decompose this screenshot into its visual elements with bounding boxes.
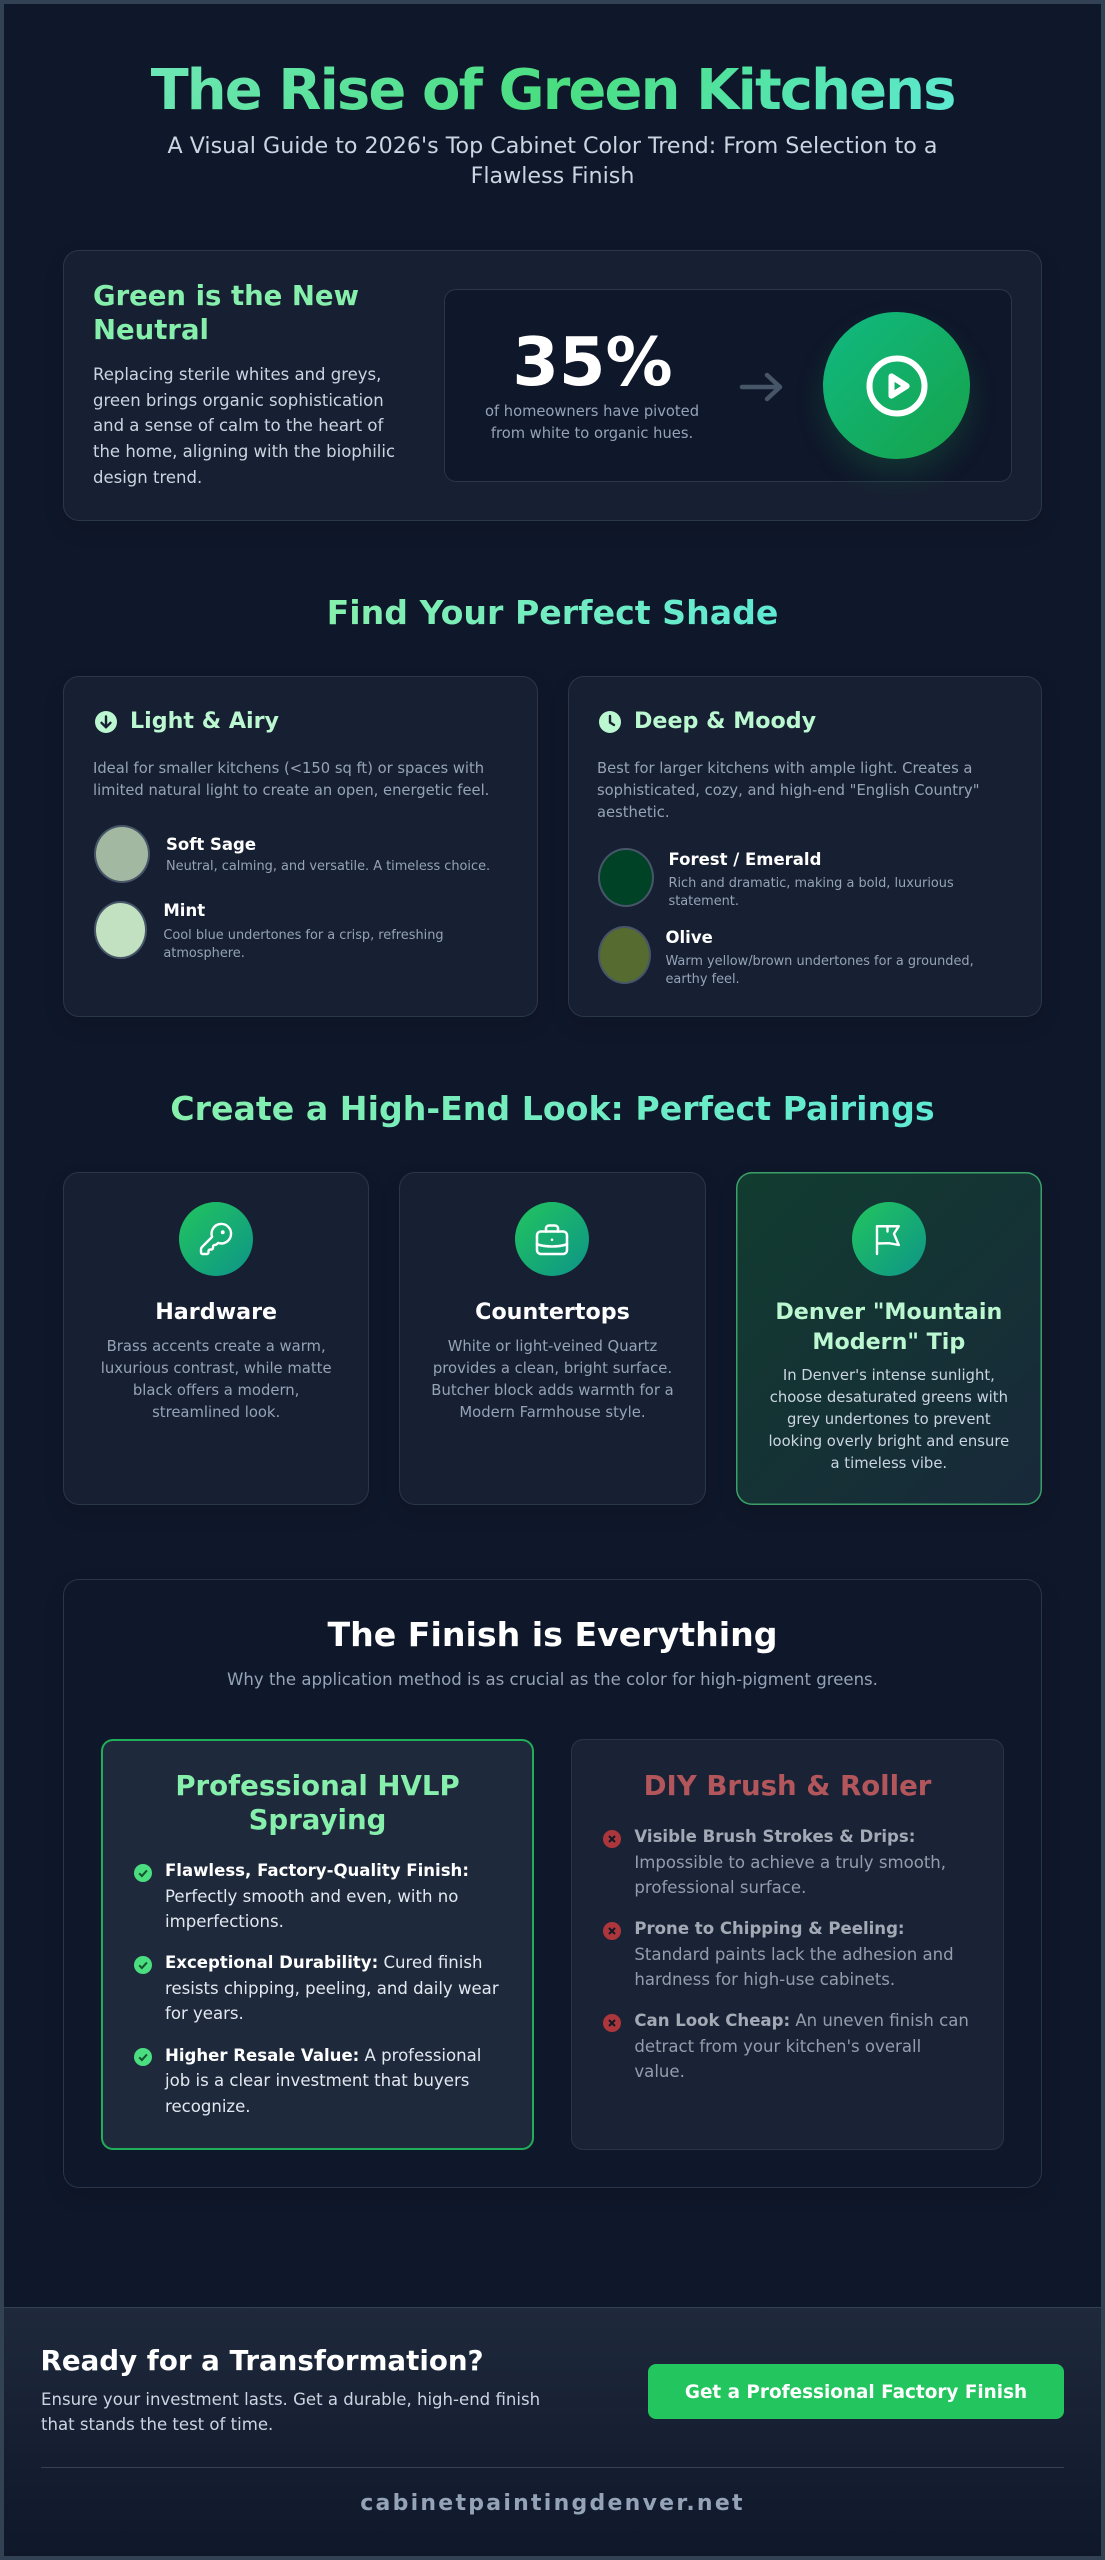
text: In Denver's intense sunlight, — [783, 1367, 995, 1384]
list item: Standard paints lack the adhesion and — [634, 1945, 954, 1964]
list item: Perfectly smooth and even, with no — [165, 1887, 458, 1906]
text: Brass accents create a warm, — [107, 1338, 326, 1355]
text — [101, 1338, 332, 1421]
description — [93, 760, 489, 799]
text block: Replacing sterile whites and greys, — [93, 365, 381, 384]
heading: The Finish is Everything — [327, 1615, 778, 1654]
mint name: Mint — [163, 901, 205, 920]
text block: and a sense of calm to the heart of — [93, 416, 383, 435]
heading: Professional HVLP — [175, 1769, 460, 1802]
icon: cross — [603, 1830, 621, 1848]
list item: value. — [634, 2062, 685, 2081]
description: aesthetic. — [597, 804, 670, 821]
panel: hardware — [63, 1172, 369, 1505]
section heading: perfect pairings: Create a High-End Look: Perfect Pairings — [170, 1089, 935, 1128]
stat caption: from white to organic hues. — [491, 425, 693, 442]
olive note — [666, 954, 974, 987]
stat caption — [485, 403, 699, 442]
text: provides a clean, bright surface. — [433, 1360, 672, 1377]
olive note: earthy feel. — [666, 972, 740, 987]
button: Get a Professional Factory Finish — [685, 2382, 1027, 2402]
mint note: Cool blue undertones for a crisp, refreshing — [163, 928, 444, 943]
panel: green is the new neutral — [63, 250, 1042, 521]
text: choose desaturated greens with — [770, 1389, 1008, 1406]
swatch: forest — [598, 848, 654, 907]
swatch: soft sage — [94, 825, 150, 883]
footer text: Ensure your investment lasts. Get a durable, high-end finish — [41, 2390, 540, 2408]
heading — [175, 1769, 460, 1836]
list item: Higher Resale Value: A professional — [165, 2046, 481, 2064]
panel: professional spraying — [101, 1739, 534, 2150]
forest note: Rich and dramatic, making a bold, luxurious — [668, 876, 954, 891]
list item — [634, 1919, 954, 1989]
icon: clock — [599, 711, 621, 733]
text — [768, 1367, 1009, 1472]
heading: Spraying — [249, 1803, 386, 1836]
heading: Denver "Mountain — [775, 1299, 1002, 1325]
panel: light and airy — [63, 676, 538, 1017]
soft sage note: Neutral, calming, and versatile. A timeless choice. — [166, 859, 490, 874]
subtitle — [167, 133, 938, 189]
text: black offers a modern, — [133, 1382, 299, 1399]
forest note: statement. — [668, 894, 739, 909]
forest note — [668, 876, 954, 909]
text — [431, 1338, 674, 1421]
icon: cross — [603, 1922, 621, 1940]
text: streamlined look. — [152, 1404, 280, 1421]
icon: check — [134, 1956, 152, 1974]
footer heading: Ready for a Transformation? — [40, 2344, 484, 2377]
panel: diy brush and roller — [571, 1739, 1004, 2150]
list item: Prone to Chipping & Peeling: — [634, 1919, 905, 1938]
text block: green brings organic sophistication — [93, 391, 384, 410]
subtitle: Flawless Finish — [471, 163, 634, 189]
text block — [93, 365, 395, 487]
list item — [634, 2011, 969, 2081]
description: Best for larger kitchens with ample light. Creates a — [597, 760, 972, 777]
list item — [164, 2046, 481, 2116]
heading: Green is the New — [93, 280, 359, 312]
panel: denver tip — [736, 1172, 1042, 1505]
list item: detract from your kitchen's overall — [634, 2037, 921, 2056]
description: limited natural light to create an open, energetic feel. — [93, 782, 489, 799]
subtitle: Why the application method is as crucial as the color for high-pigment greens. — [227, 1670, 878, 1689]
footer text — [41, 2390, 540, 2434]
stat box — [444, 289, 1012, 482]
mint note: atmosphere. — [163, 946, 245, 961]
description: sophisticated, cozy, and high-end "English Country" — [597, 782, 980, 799]
footer text: that stands the test of time. — [41, 2415, 273, 2434]
section heading: find your perfect shade: Find Your Perfect Shade — [327, 593, 778, 632]
swatch: mint — [94, 901, 147, 959]
text: White or light-veined Quartz — [448, 1338, 657, 1355]
list item: for years. — [165, 2004, 244, 2023]
text: grey undertones to prevent — [787, 1411, 991, 1428]
text: Butcher block adds warmth for a — [431, 1382, 674, 1399]
text: a timeless vibe. — [831, 1455, 947, 1472]
text: looking overly bright and ensure — [768, 1433, 1009, 1450]
heading: Countertops — [475, 1299, 630, 1325]
description — [597, 760, 980, 821]
heading: DIY Brush & Roller — [644, 1769, 931, 1802]
heading: Hardware — [155, 1299, 277, 1325]
panel: deep and moody — [568, 676, 1042, 1017]
list item: Visible Brush Strokes & Drips: — [634, 1827, 915, 1846]
heading — [775, 1299, 1002, 1355]
icon: check — [134, 1864, 152, 1882]
olive name: Olive — [666, 928, 713, 947]
list item — [165, 1953, 499, 2023]
stat caption: of homeowners have pivoted — [485, 403, 699, 420]
text: Modern Farmhouse style. — [459, 1404, 646, 1421]
list item: Impossible to achieve a truly smooth, — [634, 1853, 946, 1872]
icon: flag — [852, 1202, 926, 1276]
list item: Exceptional Durability: Cured finish — [165, 1953, 483, 1972]
panel: countertops — [399, 1172, 706, 1505]
list item: resists chipping, peeling, and daily wear — [165, 1979, 499, 1998]
panel: the finish is everything — [63, 1579, 1042, 2188]
title: The Rise of Green Kitchens — [150, 58, 955, 122]
list item: recognize. — [165, 2097, 251, 2116]
list item: hardness for high-use cabinets. — [634, 1970, 895, 1989]
heading — [93, 280, 359, 346]
button — [648, 2364, 1064, 2419]
swatch: olive — [598, 926, 650, 984]
heading: Light & Airy — [130, 708, 279, 734]
heading: Modern" Tip — [812, 1329, 965, 1355]
list item — [165, 1861, 469, 1931]
text block: the home, aligning with the biophilic — [93, 442, 395, 461]
icon: briefcase — [515, 1202, 589, 1276]
list item: job is a clear investment that buyers — [165, 2071, 469, 2090]
stat number: 35% — [512, 322, 673, 400]
icon: check — [134, 2048, 152, 2066]
icon: arrow down circle — [95, 711, 117, 733]
text: luxurious contrast, while matte — [101, 1360, 332, 1377]
soft sage name: Soft Sage — [166, 834, 256, 854]
forest name: Forest / Emerald — [668, 850, 821, 868]
arrow — [740, 372, 782, 402]
description: Ideal for smaller kitchens (<150 sq ft) or spaces with — [93, 760, 484, 777]
icon: key — [179, 1202, 253, 1276]
mint note — [163, 928, 444, 961]
heading: Deep & Moody — [634, 708, 816, 734]
website: cabinetpaintingdenver.net — [360, 2491, 745, 2516]
list item: Can Look Cheap: An uneven finish can — [634, 2011, 969, 2030]
subtitle: A Visual Guide to 2026's Top Cabinet Color Trend: From Selection to a — [167, 133, 938, 159]
footer — [0, 2307, 1105, 2560]
list item: imperfections. — [165, 1912, 284, 1931]
olive note: Warm yellow/brown undertones for a grounded, — [666, 954, 974, 969]
icon: play circle — [823, 312, 970, 459]
heading: Neutral — [93, 314, 209, 346]
list item — [634, 1827, 946, 1897]
list item: Flawless, Factory-Quality Finish: — [165, 1861, 469, 1880]
icon: cross — [603, 2014, 621, 2032]
text block: design trend. — [93, 468, 202, 487]
list item: professional surface. — [634, 1878, 806, 1897]
